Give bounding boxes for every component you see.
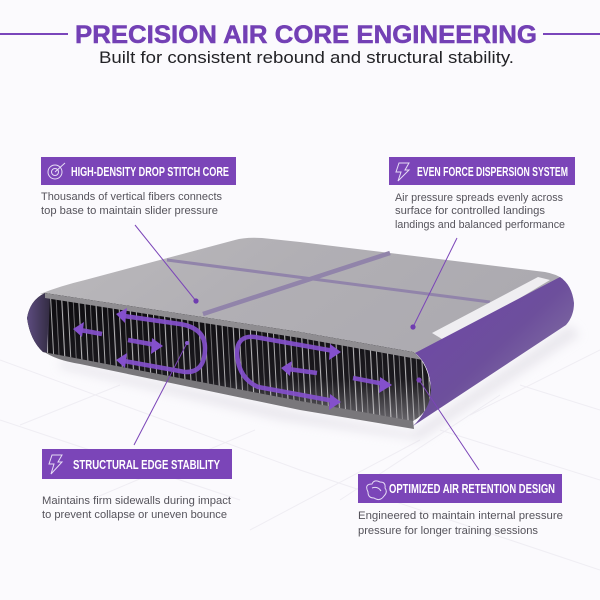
icon: air swirl [367,481,386,500]
callout: even force dispersion system: surface for controlled landings [395,205,546,217]
body text: Thousands of vertical fibers connects [41,191,222,203]
callout: high-density drop stitch core [41,157,236,217]
cross-section core [27,293,431,421]
header text: HIGH-DENSITY DROP STITCH CORE [71,164,229,179]
air flow arrows [80,316,384,401]
fibers [47,294,430,420]
stripe lengthwise [167,260,490,302]
body text: Maintains firm sidewalls during impact [42,495,231,507]
floor grid [0,350,600,570]
callout: optimized air retention design: pressure for longer training sessions [358,525,539,537]
header text: STRUCTURAL EDGE STABILITY [73,457,220,472]
header bar [42,449,232,479]
icon: target [48,163,65,179]
mat underside rim [43,351,414,429]
small right arrow [128,340,156,345]
loop two [237,337,334,401]
left inner wall [27,293,50,353]
loop one [124,316,205,372]
header bar [41,157,236,185]
callout: optimized air retention design [358,474,563,537]
upper rim [45,293,423,360]
leader line: even force dispersion [410,238,457,330]
callout: structural edge stability [42,449,232,521]
purple end wall [413,277,574,426]
core background [27,293,431,421]
callout: high-density drop stitch core: top base to maintain slider pressure [41,205,218,217]
stripe crosswise [203,253,390,314]
title rule right [543,33,600,35]
leader line: drop stitch core [135,225,199,304]
icon: lightning bolt [396,163,409,181]
title block [0,21,600,67]
title: PRECISION AIR CORE ENGINEERING [75,21,537,49]
shadow [60,325,580,440]
white strip [432,277,550,342]
body text: Air pressure spreads evenly across [395,192,563,204]
small left arrow [80,330,102,334]
header bar [358,474,562,503]
title rule left [0,33,68,35]
callout: even force dispersion system: landings and balanced performance [395,219,565,231]
body text: Engineered to maintain internal pressure [358,510,563,522]
mid left arrow [288,369,317,373]
leader line: air retention [416,377,479,470]
callout: structural edge stability: to prevent collapse or uneven bounce [42,509,227,521]
callout: even force dispersion system [389,157,575,231]
arrowheads [73,308,392,410]
air mat illustration [20,238,580,440]
top surface [40,238,563,354]
icon: lightning bolt [49,455,62,474]
leader line: structural edge [134,341,189,445]
far right arrow [353,378,384,384]
header bar [389,157,575,185]
subtitle: Built for consistent rebound and structural stability. [99,48,514,67]
